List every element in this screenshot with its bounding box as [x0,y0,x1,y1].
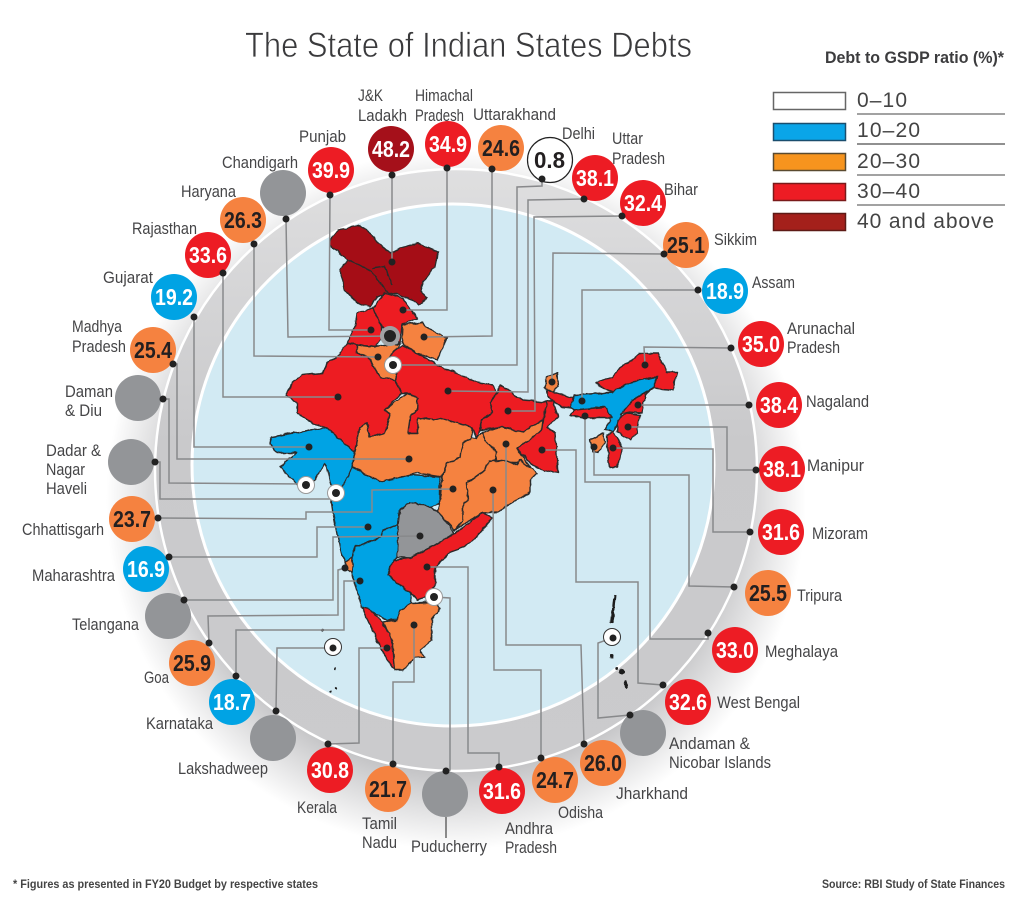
leader line [194,317,309,447]
Maharashtra [330,467,440,562]
state name: Lakshadweep [178,760,268,778]
callout: Chhattisgarh [22,486,456,542]
West Bengal [517,400,558,473]
callout: Nagaland [634,382,869,428]
callout: Kerala [297,644,390,817]
state name: Pradesh [787,339,840,357]
marker dots [154,486,456,522]
marker dots [324,644,390,748]
legend item: 20-30: 20–30 [857,150,920,173]
callout: Odisha [490,486,604,822]
state name [358,87,407,125]
value badge [759,446,805,492]
leader line [286,219,390,337]
value badge: 18.9 [706,278,744,304]
Assam [570,377,657,432]
state name: Nagar [46,461,85,479]
callout: Assam [578,268,795,404]
value badge [365,766,411,812]
value badge [209,679,255,725]
leader line [329,195,371,330]
callout: Himachal Pradesh [400,87,473,314]
callout: Jharkhand [502,440,688,803]
leader line [391,175,393,262]
state name: Daman [65,383,113,401]
state name: Chandigarh [222,154,298,172]
Madhya Pradesh [352,393,472,482]
value badge [220,197,266,243]
value badge [479,768,525,814]
Odisha [455,460,537,530]
marker dots [390,622,418,768]
callout: Telangana [72,532,424,639]
state name: Uttar [612,130,643,148]
marker dots [400,164,450,314]
state name [72,318,126,356]
state name: Dadar & [46,442,101,460]
leader line [276,648,333,711]
value badge [308,147,354,193]
state name: Maharashtra [32,567,116,585]
legend item: 30-40 [774,180,1005,205]
value badge: 38.4 [760,392,798,418]
marker dots [190,314,312,450]
callout: Bihar [504,180,698,414]
leader line [508,216,622,411]
marker dots [504,212,626,414]
callout: Andaman and Nicobar Islands [598,628,771,772]
marker dots [250,240,382,360]
label tick [445,817,447,838]
value badge [123,546,169,592]
marker dots [548,250,668,386]
state name: Rajasthan [132,220,197,238]
Mizoram [607,432,623,468]
state name: & Diu [65,402,102,420]
state name: Delhi [562,125,595,143]
legend item: 30-40: 30–40 [857,180,920,203]
leader line [542,450,663,685]
marker dots [170,360,412,462]
legend [774,48,1005,233]
marker dots [272,638,342,714]
callout: Rajasthan [132,220,342,400]
state name: Bihar [664,181,698,199]
value badge [532,757,578,803]
state name: Puducherry [411,838,488,856]
Nagaland [620,388,653,415]
callout: Puducherry [411,588,488,856]
value badge [702,268,748,314]
value badge: 39.9 [312,157,350,183]
value badge [580,740,626,786]
value badge [758,509,804,555]
map of India [270,225,677,693]
state name: Karnataka [146,715,214,733]
marker dots [642,344,734,368]
Chhattisgarh [438,432,497,530]
marker dots [610,444,754,536]
Kerala [362,607,397,670]
leader line [158,489,453,519]
state name: Uttarakhand [473,106,556,124]
legend item: 0-10: 0–10 [857,89,907,112]
leader line [582,290,698,401]
state name: Nagaland [806,393,869,411]
state name: Tamil [362,815,397,833]
state name: Arunachal [787,320,855,338]
leader line [169,527,368,557]
callout: Dadar and Nagar Haveli [46,439,344,502]
leader line [552,253,664,382]
leader line [628,427,756,470]
marker dots [582,412,712,636]
leader line [163,399,306,484]
marker dots [578,286,702,404]
callout: Tripura [590,444,843,616]
Uttar Pradesh [385,345,498,438]
value badge: 26.0 [584,750,622,776]
state name: Nicobar Islands [669,754,771,772]
value badge: 19.2 [155,284,193,310]
callout: Uttarakhand [420,106,556,340]
value badge [151,274,197,320]
value badge: 34.9 [429,131,467,157]
state name: Haryana [181,183,237,201]
callout: Tamil Nadu [362,622,418,852]
state name: Himachal [415,87,473,105]
marker dots [384,176,546,374]
value badge [712,627,758,673]
marker dots [444,196,588,394]
value badge: 48.2 [372,136,410,162]
marker dots [502,440,588,748]
callout: Goa [144,564,348,687]
value badge: 24.7 [536,767,574,793]
state name: Telangana [72,616,140,634]
footnote: * Figures as presented in FY20 Budget by respective states [13,879,318,891]
callout: Lakshadweep [178,638,342,778]
value badge: 35.0 [742,331,780,357]
marker dots [180,532,424,604]
badge [145,593,191,639]
value badge [130,327,176,373]
callout: Andhra Pradesh [424,564,557,857]
marker dots [326,192,374,334]
callout: J&K and Ladakh [358,87,414,266]
value badge: 25.4 [134,337,172,363]
callout: Madhya Pradesh [72,318,412,462]
Manipur [617,413,640,440]
source: Source: RBI Study of State Finances [822,879,1005,891]
callout: Mizoram [610,444,868,555]
legend item: 20-30 [774,150,1005,175]
leader line [403,168,447,310]
callout: Karnataka [146,578,364,733]
legend heading: Debt to GSDP ratio (%)* [825,48,1004,67]
Meghalaya [570,407,612,418]
state name: Haveli [46,480,87,498]
marker dots [426,588,450,774]
marker dots [160,396,314,494]
Jharkhand [482,420,543,467]
value badge [620,180,666,226]
callout: Punjab [299,128,374,334]
state name: Jharkhand [616,785,688,803]
leader line [236,581,360,676]
state name: Andhra [505,820,554,838]
Himachal Pradesh [373,293,417,343]
Uttarakhand [402,322,447,360]
state name [505,820,557,857]
value badge [738,321,784,367]
value badge [425,121,471,167]
value badge: 18.7 [213,689,251,715]
leader line [208,568,345,643]
badge [115,375,161,421]
value badge: 16.9 [127,556,165,582]
leader line [427,567,499,767]
value badge [663,222,709,268]
value badge [109,496,155,542]
state name: Pradesh [612,150,665,168]
callout: Meghalaya [582,412,839,673]
Karnataka [352,525,412,620]
value badge [169,640,215,686]
leader line [155,462,336,499]
value badge: 31.6 [483,778,521,804]
state name: Nadu [362,834,397,852]
state name: Pradesh [505,839,557,857]
marker dots [590,444,738,590]
state name: Pradesh [72,338,126,356]
callout: Sikkim [548,222,757,386]
leader line [594,447,734,587]
value badge [478,125,524,171]
badge [250,715,296,761]
leader line [434,597,450,771]
value badge: 25.1 [667,232,705,258]
state name: Andaman & [669,735,750,753]
state name: Ladakh [358,107,407,125]
badge [422,771,468,817]
callout: Manipur [624,424,864,492]
state name: Punjab [299,128,346,146]
state name: Sikkim [714,231,757,249]
marker dots [490,486,544,762]
legend item: 0-10 [774,89,1005,114]
marker dots [282,216,398,344]
badge [260,170,306,216]
marker dots [388,172,396,266]
marker dots [538,446,666,688]
marker dots [424,564,502,770]
value badge: 23.7 [113,506,151,532]
value badge: 38.1 [763,456,801,482]
callout: Chandigarh [222,154,398,344]
Andhra Pradesh [388,513,493,600]
value badge [745,570,791,616]
legend item: 10-20: 10–20 [857,119,920,142]
leader line [328,648,387,744]
leader line [493,490,541,758]
callout: Arunachal Pradesh [642,320,855,368]
Punjab [347,308,382,347]
marker dots [232,578,364,680]
leader line [638,404,749,406]
callout: Delhi [384,125,595,374]
legend item: 10-20 [774,119,1005,144]
state name: West Bengal [717,694,800,712]
circular backdrop [106,150,806,850]
state name [46,442,101,498]
marker dots [604,628,634,718]
leader line [184,536,420,600]
state name: Manipur [807,457,864,475]
state name [362,815,397,852]
Lakshadweep islands [322,629,337,693]
Rajasthan [286,343,402,452]
leader line [173,364,409,459]
state name: Chhattisgarh [22,521,104,539]
title: The State of Indian States Debts [245,26,692,65]
leader line [393,179,542,365]
marker dots [206,564,348,646]
J&K division lines [348,260,392,293]
leader line [393,625,414,764]
callout: Daman and Diu [65,375,314,494]
badge [108,439,154,485]
marker dots [166,524,372,560]
legend item: 40 and above [774,210,994,233]
value badge: 25.5 [749,580,787,606]
Sikkim [545,373,558,392]
value badge: 33.6 [189,242,227,268]
leader line [223,273,338,397]
state name: Goa [144,669,170,687]
leader line [506,444,584,744]
value badge: 24.6 [482,135,520,161]
marker dots [420,166,496,340]
value badge: 25.9 [173,650,211,676]
state name: Gujarat [103,269,153,287]
value badge: 21.7 [369,776,407,802]
leader line [598,638,630,718]
value badge [528,138,572,182]
Gujarat [270,428,355,500]
Bihar [480,385,547,432]
value badge: 31.6 [762,519,800,545]
value badge [307,747,353,793]
value badge: 26.3 [224,207,262,233]
marker dots [152,458,344,502]
value badge [665,679,711,725]
state name: Mizoram [812,525,868,543]
value badge [185,232,231,278]
West Bengal north [547,390,573,408]
callout: Haryana [181,183,382,360]
state name: J&K [358,87,383,105]
leader line [448,199,584,392]
state name [669,735,771,772]
value badge [572,155,618,201]
value badge: 30.8 [311,757,349,783]
value badge: 33.0 [716,637,754,663]
state name [612,130,665,168]
state name: Tripura [797,587,843,605]
value badge [368,126,414,172]
badge [620,710,666,756]
state name: Assam [752,274,795,292]
Telangana [397,502,455,558]
leader line [254,244,378,357]
J&K and Ladakh [330,225,438,307]
Goa [345,557,353,573]
value badge: 32.4 [624,190,662,216]
legend item: 40 and above: 40 and above [857,210,994,233]
marker dots [220,270,342,400]
value badge: 0.8 [534,147,565,173]
callout: Gujarat [103,269,312,450]
callout: Maharashtra [32,524,372,592]
state name [787,320,855,357]
Tamil Nadu [383,602,440,670]
state name: Kerala [297,799,338,817]
leader line [613,448,750,532]
leader line [424,169,492,337]
state name: Pradesh [415,107,464,125]
state name [415,87,473,125]
leader line [644,347,731,365]
state name: Odisha [558,804,604,822]
callout: Uttar Pradesh [444,130,665,394]
state name: Meghalaya [765,643,839,661]
value badge [756,382,802,428]
Haryana [357,343,400,380]
leader line [585,416,708,639]
value badge: 32.6 [669,689,707,715]
marker dots [634,402,752,408]
Tripura [590,433,605,453]
Arunachal Pradesh [596,353,677,392]
Andaman and Nicobar islands [610,595,628,690]
marker dots [624,424,760,474]
value badge: 38.1 [576,165,614,191]
callout: West Bengal [538,446,800,725]
state name [65,383,113,420]
state name: Madhya [72,318,123,336]
